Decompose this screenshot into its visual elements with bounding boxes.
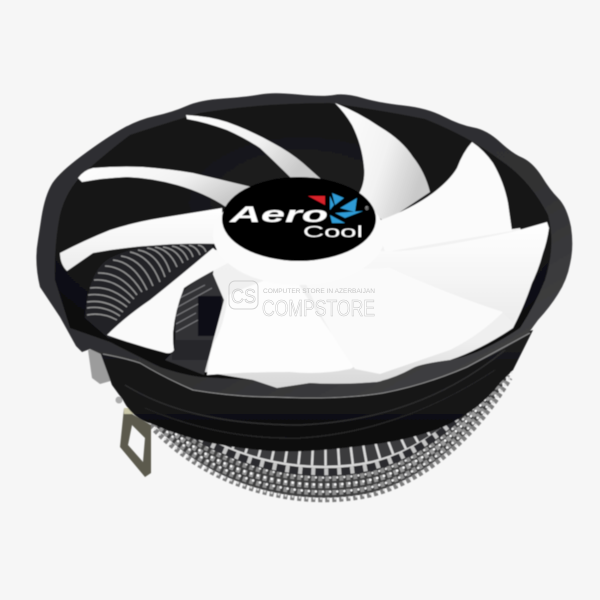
rim highlight line xyxy=(103,333,530,398)
product illustration: CPU cooler xyxy=(36,92,574,503)
logo wordmark: Cool: Cool xyxy=(303,224,363,241)
central heatsink slots xyxy=(165,270,225,380)
logo wordmark: Aero: Aero xyxy=(228,202,328,227)
fan well xyxy=(55,103,551,388)
wavy outer rim xyxy=(36,93,572,397)
watermark: Compstore xyxy=(229,281,375,321)
watermark name: COMPSTORE xyxy=(262,295,375,321)
cooler body xyxy=(36,93,572,500)
watermark tagline: COMPUTER STORE IN AZERBAIJAN xyxy=(263,288,375,295)
AeroCool logo xyxy=(228,193,369,241)
black shroud band xyxy=(100,330,533,451)
watermark logo: CS xyxy=(231,286,256,308)
fan blade: right xyxy=(375,142,512,252)
black logo hub xyxy=(222,177,376,261)
fan blade: left xyxy=(60,208,222,271)
fan blade: upper left xyxy=(78,167,256,207)
hub white collar xyxy=(213,185,385,285)
fan blade: lower sweep xyxy=(300,268,503,374)
logo pinwheel icon xyxy=(308,193,363,223)
fan blade: top thin xyxy=(186,115,322,180)
registered mark: ® xyxy=(365,205,369,212)
mounting clip xyxy=(88,346,151,477)
lower white fan area xyxy=(205,228,538,388)
lower heatsink fins xyxy=(150,333,512,500)
fan blade: lower left xyxy=(107,248,230,353)
upper heatsink arcs xyxy=(84,244,212,340)
fan blade: lower right xyxy=(350,222,549,323)
fan blade: top right xyxy=(335,103,430,222)
fan blade: bottom xyxy=(207,270,354,375)
